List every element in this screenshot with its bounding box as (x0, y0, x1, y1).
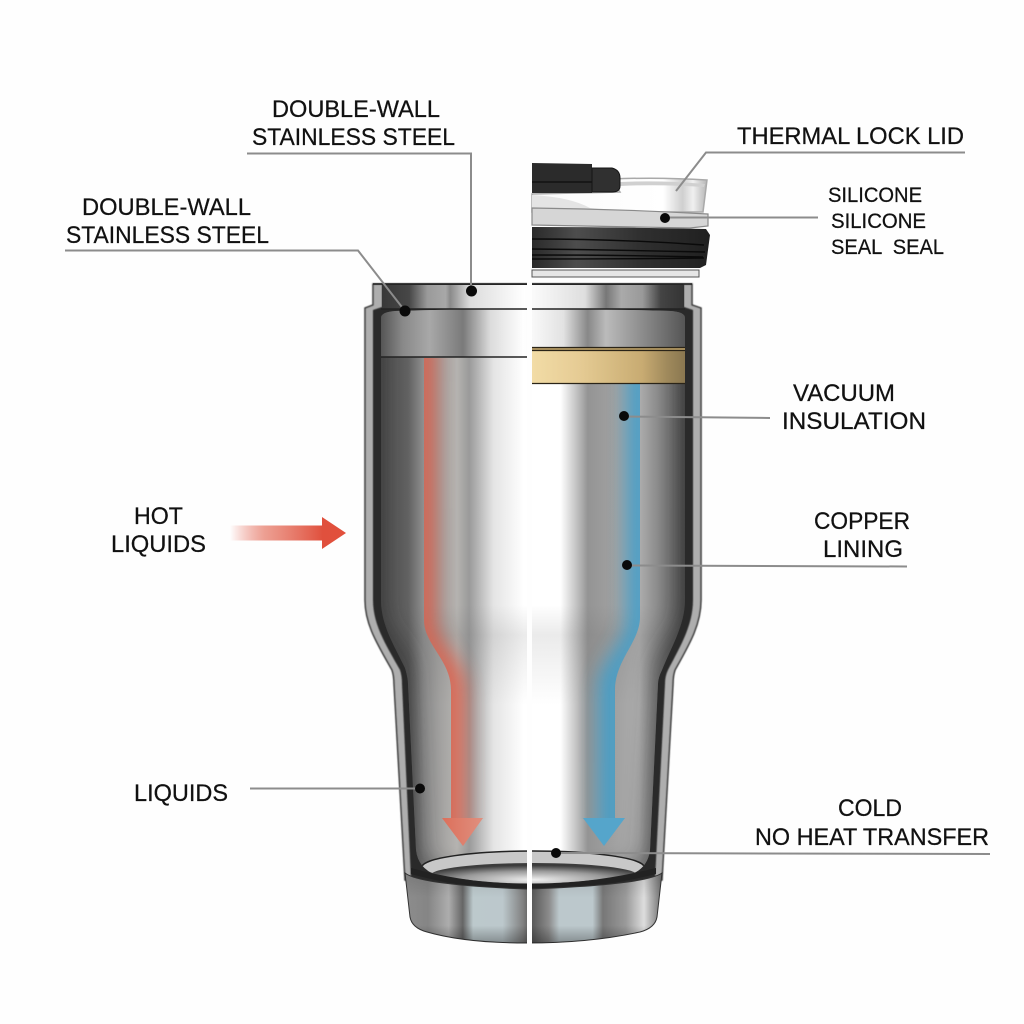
callout: cold no heat transfer (551, 795, 990, 858)
lid swoosh (532, 195, 650, 212)
callout: cold no heat transfer: COLD (838, 795, 902, 822)
callout: double-wall stainless steel upper (247, 96, 477, 296)
callout: double-wall stainless steel upper: DOUBLE-WALL (272, 96, 440, 123)
callout: silicone seal: SILICONE (831, 210, 926, 233)
callout: copper lining: LINING (823, 536, 903, 563)
interior edge shading (381, 358, 685, 865)
threaded gasket (532, 227, 710, 268)
callout: double-wall stainless steel lower (65, 194, 410, 316)
lid (532, 163, 710, 277)
dome inner band (620, 181, 705, 187)
callout: vacuum insulation: VACUUM (793, 380, 895, 407)
centre split (527, 275, 532, 947)
callout: cold no heat transfer: NO HEAT TRANSFER (755, 824, 989, 851)
callout: copper lining (622, 508, 910, 570)
callout: double-wall stainless steel lower: DOUBLE-WALL (82, 194, 251, 221)
callout: hot liquids with arrow (111, 503, 346, 558)
interior steel (381, 310, 685, 884)
hot flow arrow head (442, 818, 483, 846)
silicone seal ring (532, 208, 708, 228)
bottom dark band (411, 868, 656, 890)
callout: silicone seal: SILICONE (828, 184, 922, 207)
neck shadow band (448, 617, 648, 678)
floor ring (422, 851, 644, 883)
upper interior band (381, 310, 473, 356)
callout: hot liquids with arrow: HOT (134, 503, 183, 530)
callout: liquids: LIQUIDS (134, 780, 228, 807)
cold flow arrow shaft (598, 366, 652, 840)
floor dish (432, 863, 635, 884)
inner dark wall (373, 284, 693, 890)
rim section (382, 285, 684, 309)
hot flow arrow shaft (424, 358, 478, 818)
metal base (405, 873, 662, 943)
lower lid rim (532, 270, 699, 277)
callout: vacuum insulation (619, 380, 926, 435)
callout: vacuum insulation: INSULATION (782, 408, 926, 435)
callout: double-wall stainless steel upper: STAINLESS STEEL (252, 124, 455, 151)
callout: liquids (134, 780, 425, 807)
callout: double-wall stainless steel lower: STAINLESS STEEL (66, 222, 269, 249)
clear dome (532, 178, 707, 212)
callout: silicone seal: SEAL SEAL (831, 236, 944, 259)
callout: silicone seal (660, 184, 944, 259)
rim lines (373, 284, 692, 357)
copper lining band (532, 347, 685, 384)
cold flow arrow head (583, 818, 625, 846)
callout: thermal lock lid (676, 123, 965, 191)
callout: hot liquids with arrow: LIQUIDS (111, 531, 206, 558)
tumbler cross-section (365, 275, 701, 947)
callout: thermal lock lid: THERMAL LOCK LID (737, 123, 964, 150)
callout: copper lining: COPPER (814, 508, 910, 535)
lid tab handle (532, 163, 620, 193)
outer stainless wall (365, 284, 701, 880)
